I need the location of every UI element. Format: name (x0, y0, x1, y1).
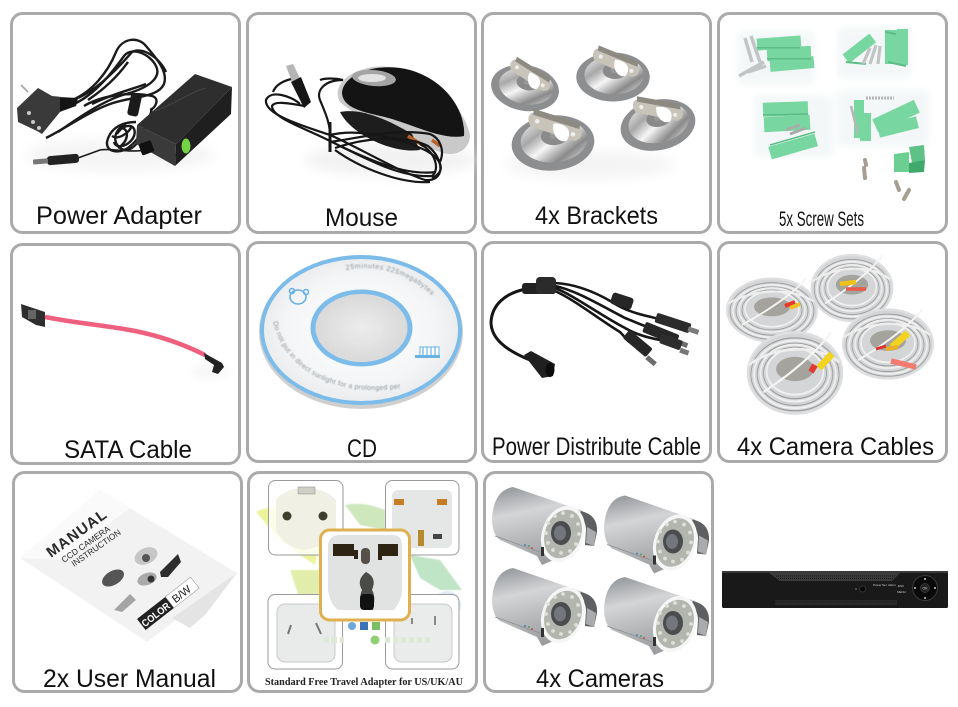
card frame (482, 242, 710, 462)
panel: power distribute cable (482, 242, 710, 462)
curved disc text (272, 262, 434, 392)
manual cover title: CCD CAMERA (59, 523, 112, 565)
card frame (482, 14, 710, 232)
yellow and red connectors (785, 282, 916, 372)
plug photo: top left (268, 480, 343, 555)
color label (137, 577, 200, 630)
card frame (12, 14, 240, 232)
label: SATA Cable: SATA Cable (64, 436, 192, 464)
label: 4x Brackets: 4x Brackets (535, 202, 658, 230)
card frame (484, 472, 712, 692)
manual cover title: MANUAL (43, 506, 111, 561)
screw set 1 (739, 36, 814, 76)
icon: CD (259, 255, 463, 409)
world map background (256, 504, 462, 628)
orange wires (408, 136, 440, 146)
panel: CD (246, 241, 477, 463)
label: 4x Camera Cables: 4x Camera Cables (737, 433, 934, 461)
DC plug (138, 140, 155, 156)
label: 4x Cameras: 4x Cameras (536, 665, 664, 693)
icon: screw sets (738, 28, 928, 199)
icon: DVR recorder (722, 571, 948, 608)
plug (17, 88, 78, 134)
card frame (14, 472, 242, 692)
top vent (769, 573, 900, 581)
color label: COLOR (140, 600, 173, 630)
ferrite (610, 292, 634, 310)
panel: cameras (484, 472, 712, 693)
label: Power Adapter: Power Adapter (36, 202, 202, 230)
loose screws (864, 160, 909, 199)
card frame (718, 242, 946, 462)
curved disc text: 25minutes 225megabytes (345, 262, 434, 296)
green terminal block (894, 145, 925, 173)
plug photo: top right (386, 480, 459, 555)
panel: mouse (248, 14, 476, 232)
small certification icons (324, 622, 432, 644)
lens (860, 586, 866, 592)
label: CD: CD (347, 435, 377, 463)
caption: Standard Free Travel Adapter: Standard Free Travel Adapter for US/UK/AU (265, 677, 463, 688)
panel: user manual (14, 472, 242, 693)
card frame (12, 244, 240, 464)
screw set 4 (851, 98, 920, 141)
screw set 3 (763, 101, 818, 159)
black top (342, 67, 464, 137)
splitter (522, 283, 556, 294)
ferrite (127, 93, 142, 117)
card frame (718, 14, 946, 232)
card frame (248, 242, 476, 462)
front panel labels: ESC (898, 584, 905, 588)
panel: travel adapter (248, 472, 476, 692)
icon: four brackets (487, 45, 700, 179)
panel: power adapter (12, 14, 240, 232)
icon: SATA cable (21, 304, 230, 379)
label: Power Distribute Cable: Power Distribute Cable (492, 433, 701, 461)
panel: screw sets (718, 14, 946, 232)
label: 2x User Manual: 2x User Manual (43, 665, 216, 693)
panel: camera cables (718, 242, 946, 462)
USB plug (286, 64, 300, 82)
front panel labels: Alarm (888, 583, 896, 587)
DC plugs (623, 313, 699, 366)
chrome shell (338, 67, 470, 154)
color label: B/W (170, 583, 194, 606)
front panel labels (873, 583, 906, 594)
label: 5x Screw Sets: 5x Screw Sets (779, 208, 864, 231)
plug photo: bottom right (386, 594, 459, 669)
screw set 2 (843, 29, 908, 66)
bottom vent (775, 600, 897, 605)
direction pad: OK (922, 586, 928, 590)
front panel labels: Net (882, 583, 887, 587)
center universal plug (320, 530, 410, 620)
icon: power adapter (17, 40, 232, 171)
front panel labels: Power (873, 583, 882, 587)
front panel labels: MENU (897, 590, 906, 594)
card frame (248, 472, 476, 692)
small camera pictures (99, 544, 181, 612)
card frame (248, 14, 476, 232)
icon: four camera cable coils (727, 255, 933, 414)
manual cover title: INSTRUCTION (69, 527, 123, 569)
icon: power distribute cable (491, 277, 699, 378)
icon: four bullet cameras (492, 487, 709, 658)
adapter body (137, 74, 232, 144)
direction pad (912, 576, 938, 600)
panel: SATA cable (12, 244, 240, 464)
icon: user manual (20, 490, 237, 642)
disc logo (415, 347, 440, 358)
label: Mouse: Mouse (325, 204, 398, 232)
female jack (524, 351, 555, 378)
panel: brackets (482, 14, 710, 232)
icon: mouse (266, 64, 475, 182)
panda logo (290, 288, 308, 304)
plug photo: bottom left (268, 594, 342, 669)
curved disc text: Do not put in direct sunlight for a prolonged period (272, 321, 400, 392)
